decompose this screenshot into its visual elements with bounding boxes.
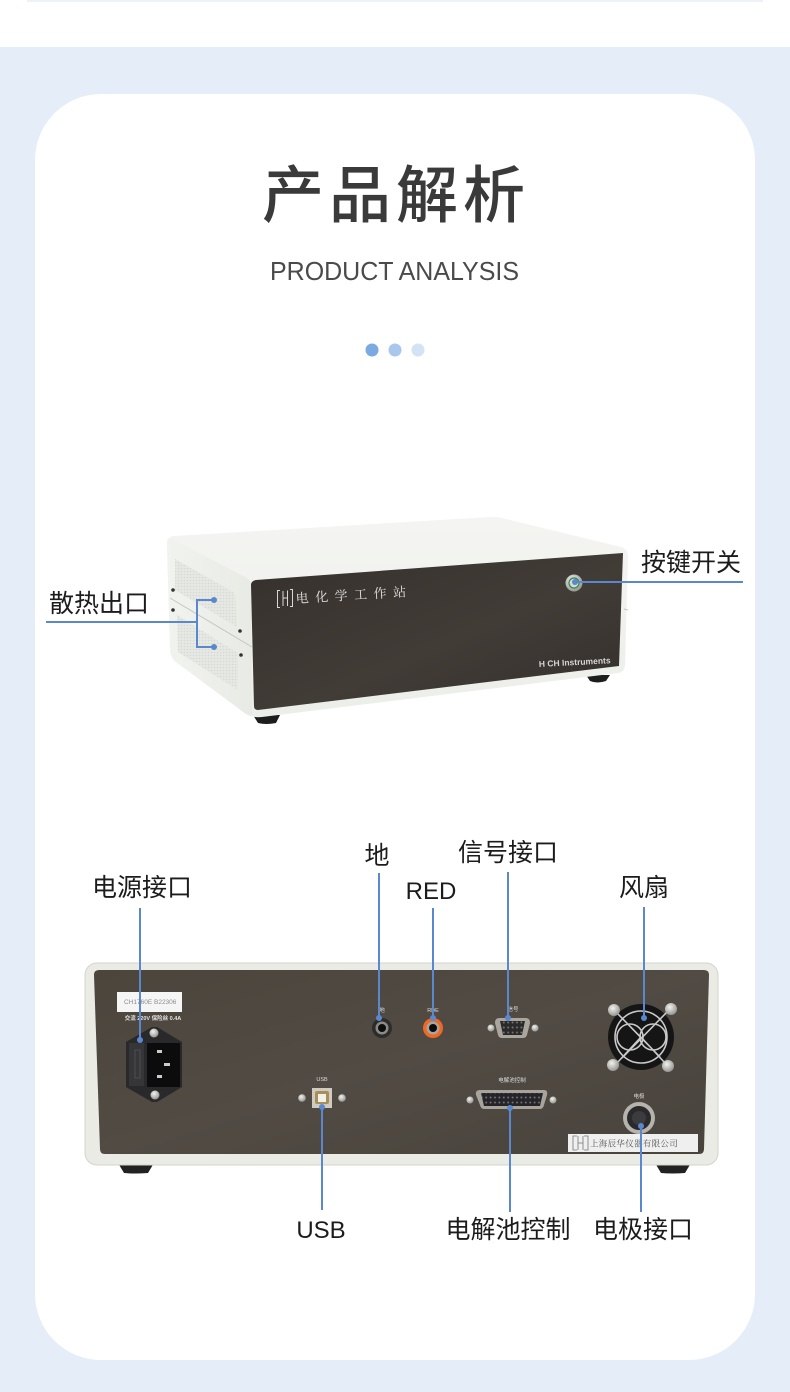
electrolytic cell DB25 port [466,1076,556,1109]
callout: electrode port [593,1123,693,1244]
rear feet [118,1163,691,1174]
callout: signal port [458,839,558,1021]
electrode connector [623,1092,655,1134]
callout: power inlet [92,874,192,1043]
voltage text: 交流 220V 保险丝 0.4A [125,1014,181,1022]
label: power inlet: 电源接口 [92,874,192,902]
power inlet [126,1027,182,1102]
product photo: front view of workstation [167,517,628,724]
ground jack: 地 [379,1006,385,1014]
front dark panel [251,553,623,710]
USB port [298,1077,346,1108]
ground jack [372,1006,392,1038]
label: ground: 地 [364,842,390,870]
callout: ground [364,842,390,1021]
power button [566,574,582,592]
subtitle: PRODUCT ANALYSIS [270,256,519,286]
serial sticker: CH1760E B22306 [124,999,177,1006]
company sticker [568,1134,698,1152]
fan [607,1003,677,1072]
callout: fan [619,874,669,1021]
serial sticker [117,992,182,1012]
front panel product name: 电化学工作站 [295,584,413,606]
product photo: rear view of workstation [85,963,718,1174]
USB port: USB [316,1077,328,1083]
label: electrolytic cell control: 电解池控制 [445,1216,571,1244]
front panel brand: H CH Instruments [539,655,611,669]
rear dark panel [94,970,709,1154]
seam and screws [170,598,252,647]
callout: power button [572,549,743,585]
callout: USB [296,1104,346,1244]
rear body [85,963,718,1165]
pagination dots [366,344,424,356]
callout: RED [406,878,456,1021]
feet [184,660,610,724]
electrolytic cell DB25 port: 电解池控制 [498,1076,526,1084]
front panel logo [278,590,292,608]
label: signal port: 信号接口 [458,839,558,867]
left side face [167,538,252,715]
top strip from previous section [27,0,763,2]
side vents [175,559,238,690]
title: 产品解析 [262,162,530,231]
callout: electrolytic cell control [445,1105,571,1244]
company sticker: 上海辰华仪器有限公司 [590,1138,678,1148]
label: heat vents: 散热出口 [49,590,149,618]
signal D-sub port [488,1005,538,1038]
label: RED: RED [406,878,456,905]
label: fan: 风扇 [619,874,669,902]
label: USB: USB [296,1217,346,1244]
signal D-sub port: 信号 [507,1005,519,1013]
label: key switch: 按键开关 [641,549,741,577]
device body [167,517,628,717]
electrode connector: 电极 [633,1092,645,1100]
label: electrode port: 电极接口 [593,1216,693,1244]
RE jack: RDE [427,1008,439,1014]
RE jack [423,1008,443,1038]
callout: heat vents [46,590,217,650]
